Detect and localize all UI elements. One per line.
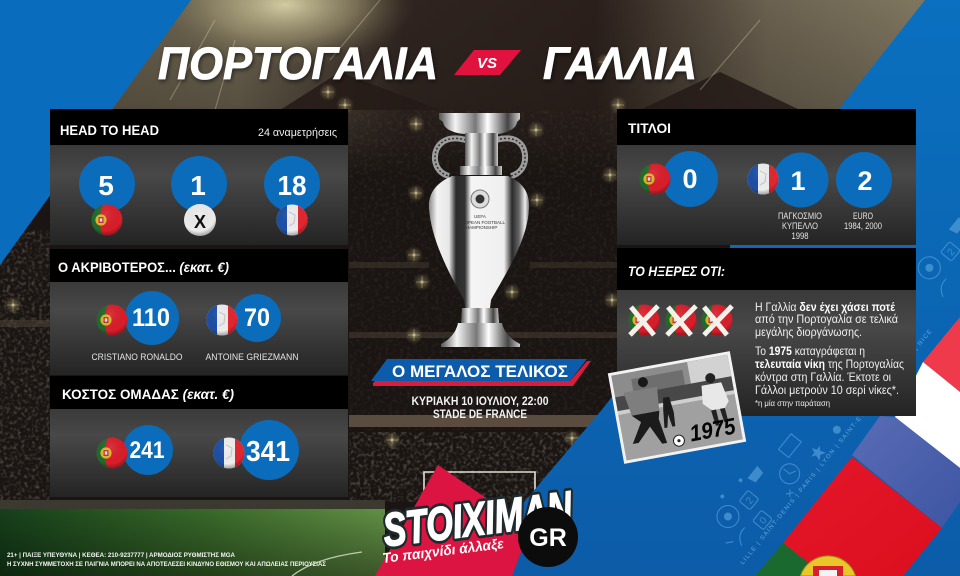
- match date and venue: STADE DE FRANCE: [433, 407, 527, 421]
- euro: 1984, 2000: [844, 221, 882, 232]
- portugal wins: [79, 156, 135, 236]
- ronaldo: [92, 291, 182, 363]
- euro: EURO: [853, 211, 873, 222]
- city and icon pattern: [696, 211, 960, 566]
- flag shapes: France: [852, 317, 960, 528]
- world cup: 1998: [792, 231, 808, 242]
- euro: [836, 152, 892, 232]
- fact one: μεγάλης διοργάνωσης.: [755, 325, 862, 339]
- panel: most expensive player: [50, 249, 348, 375]
- legal notice: 21+ | ΠΑΙΞΕ ΥΠΕΥΘΥΝΑ | ΚΕΘΕΑ: 210-9237777 | ΑΡΜΟΔΙΟΣ ΡΥΘΜΙΣΤΗΣ MGA: [7, 552, 235, 559]
- final ribbon: [371, 359, 591, 386]
- trophy: EUROPEAN FOOTBALL: [455, 220, 506, 225]
- france cost: 341: [246, 436, 290, 468]
- blue panel right: [462, 0, 960, 576]
- griezmann: [206, 294, 299, 363]
- vs badge: [454, 50, 521, 75]
- legal notice: [7, 552, 326, 568]
- portugal cost: [96, 425, 173, 475]
- title: ΠΟΡΤΟΓΑΛΙΑ: [158, 38, 438, 89]
- fact one: Η Γαλλία δεν έχει χάσει ποτέ: [755, 300, 896, 314]
- city and icon pattern: LILLE | SAINT-DENIS | PARIS | LYON | SAINT-ETIENNE | BORDEAUX | NICE: [740, 329, 933, 566]
- panel: head to head: [50, 109, 348, 245]
- world cup: [747, 152, 828, 242]
- world cup: 1: [790, 166, 806, 196]
- logo wordmark: STOIXIMAN: [380, 481, 576, 556]
- pitch: [0, 500, 385, 576]
- portugal titles: [639, 151, 718, 207]
- fact two: Γάλλοι μετρούν 10 σερί νίκες*.: [755, 383, 899, 397]
- portugal cost: 241: [130, 437, 164, 464]
- fact two: [755, 344, 904, 397]
- panel: head to head: 24 αναμετρήσεις: [258, 127, 337, 139]
- euro: 2: [857, 166, 873, 196]
- portugal titles: 0: [682, 164, 698, 194]
- gr badge: GR: [529, 524, 567, 552]
- panel: did you know: [617, 248, 916, 416]
- goal frame: [424, 472, 535, 498]
- draws: [171, 156, 227, 236]
- world cup: ΚΥΠΕΛΛΟ: [782, 221, 818, 232]
- panel: titles: [617, 109, 916, 247]
- flag shapes: Portugal: [755, 457, 942, 576]
- france wins: 18: [278, 170, 306, 201]
- portugal wins: 5: [98, 170, 114, 201]
- france cost: [213, 420, 299, 480]
- slogan: Το παιχνίδι άλλαξε: [381, 535, 505, 566]
- match date and venue: ΚΥΡΙΑΚΗ 10 ΙΟΥΛΙΟΥ, 22:00: [412, 394, 549, 408]
- vs badge: VS: [477, 55, 497, 72]
- panel: head to head: HEAD TO HEAD: [60, 122, 159, 138]
- brand logo: [375, 465, 578, 576]
- blue corner top left: [0, 0, 191, 265]
- crossed portugal balls: [628, 304, 733, 336]
- fact two: τελευταία νίκη της Πορτογαλίας: [755, 357, 904, 371]
- griezmann: 70: [244, 304, 270, 332]
- logo wordmark: [380, 481, 576, 556]
- draws: 1: [190, 170, 206, 201]
- logo wordmark: STOIXIMAN: [380, 481, 576, 556]
- title: [158, 38, 697, 89]
- footnote: *η μία στην παράταση: [755, 399, 830, 408]
- photo 1975: 1975: [688, 412, 739, 446]
- match date and venue: [412, 394, 549, 421]
- photo 1975: [608, 351, 746, 464]
- panel: did you know: ΤΟ ΗΞΕΡΕΣ ΟΤΙ:: [628, 263, 725, 279]
- france wins: [264, 156, 320, 236]
- fact two: Το 1975 καταγράφεται η: [755, 344, 865, 358]
- ronaldo: 110: [132, 304, 170, 332]
- legal notice: Η ΣΥΧΝΗ ΣΥΜΜΕΤΟΧΗ ΣΕ ΠΑΙΓΝΙΑ ΜΠΟΡΕΙ ΝΑ ΑΠΟΤΕΛΕΣΕΙ ΚΙΝΔΥΝΟ ΕΘΙΣΜΟΥ ΚΑΙ ΑΠΩΛΕΙΑΣ ΠΕΡΙΟΥΣΙΑΣ: [7, 561, 326, 568]
- panel: team cost: [50, 376, 348, 497]
- trophy: UEFA: [474, 214, 486, 219]
- trophy: [429, 113, 529, 347]
- world cup: ΠΑΓΚΟΣΜΙΟ: [778, 211, 822, 222]
- final ribbon: Ο ΜΕΓΑΛΟΣ ΤΕΛΙΚΟΣ: [392, 362, 568, 381]
- fact one: [755, 300, 898, 339]
- panel: team cost: ΚΟΣΤΟΣ ΟΜΑΔΑΣ (εκατ. €): [62, 386, 234, 402]
- draws: X: [194, 212, 206, 232]
- red wedge: [375, 465, 530, 576]
- panel: most expensive player: Ο ΑΚΡΙΒΟΤΕΡΟΣ... (εκατ. €): [58, 259, 229, 275]
- gr badge: [518, 507, 578, 567]
- title: ΓΑΛΛΙΑ: [543, 38, 697, 89]
- fact two: κόντρα στη Γαλλία. Έκτοτε οι: [755, 370, 891, 384]
- griezmann: ANTOINE GRIEZMANN: [206, 352, 299, 363]
- fact one: από την Πορτογαλία σε τελικά: [755, 312, 898, 326]
- trophy: CHAMPIONSHIP: [463, 225, 497, 230]
- panel: titles: ΤΙΤΛΟΙ: [628, 120, 671, 136]
- ronaldo: CRISTIANO RONALDO: [92, 352, 182, 363]
